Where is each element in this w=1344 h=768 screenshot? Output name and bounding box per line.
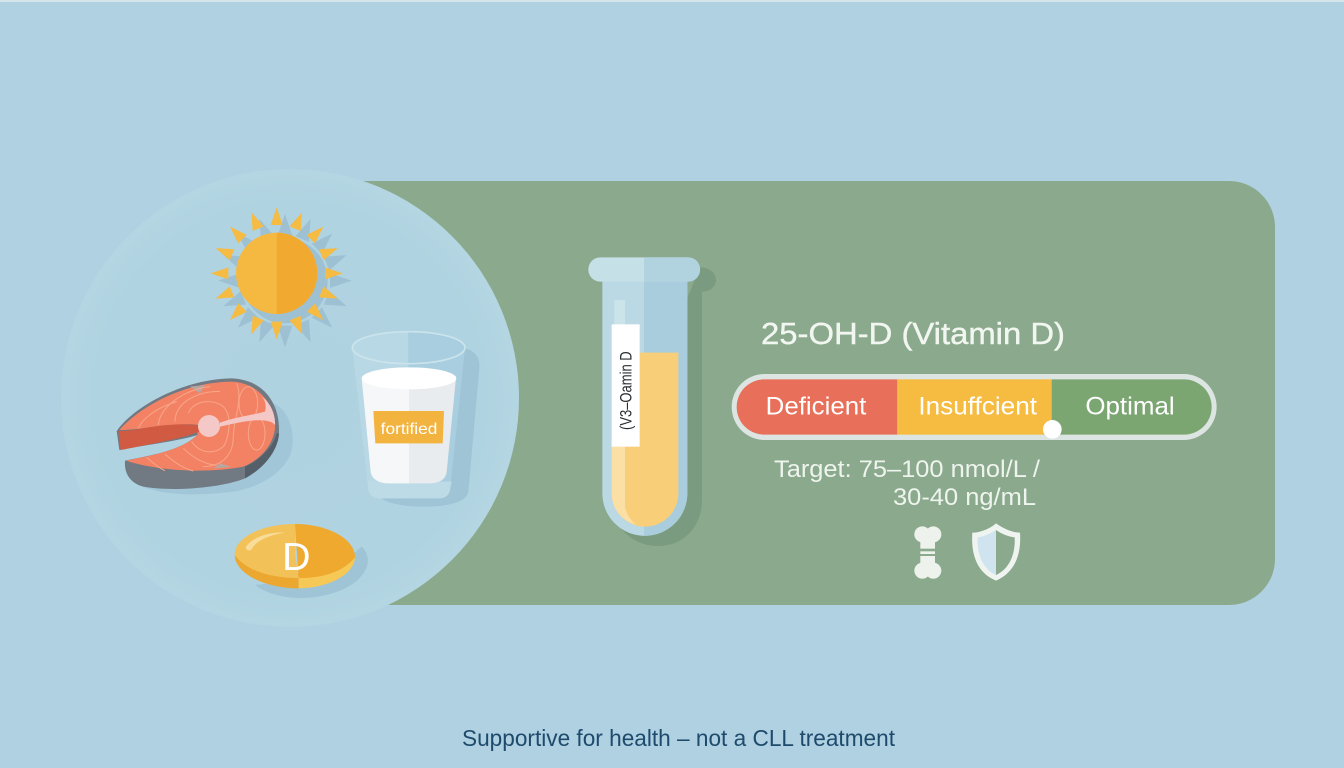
glass body [352,332,408,498]
tube highlight [614,300,625,325]
target range text: Target: 75–100 nmol/L / [774,456,1040,483]
fortified label [373,411,444,443]
segment: deficient: Deficient [766,393,866,421]
salmon cut edge [118,424,199,450]
tube label [612,324,640,447]
heading: 25-OH-D (Vitamin D): 25-OH-D (Vitamin D) [761,316,1065,351]
footer note: Supportive for health – not a CLL treatment [462,725,896,751]
tube shadow [620,267,716,546]
softgel letter D: D [282,535,311,579]
target range text: 30-40 ng/mL [893,484,1036,511]
glass shadow [380,348,479,507]
milk [362,367,456,483]
softgel shadow [255,547,368,598]
sun shadow rays [218,214,352,347]
softgel top [235,524,299,578]
softgel rim [235,556,299,588]
marker dot [1043,420,1062,439]
salmon skin highlights [190,385,232,468]
serum liquid [612,353,678,527]
salmon flesh contour lines [138,383,265,471]
segment: insufficient [897,379,1052,435]
sun disc [236,233,317,314]
softgel highlight [246,533,285,550]
salmon backbone [198,397,275,437]
fortified label: fortified [381,421,437,438]
segment: optimal: Optimal [1085,393,1175,421]
segment: deficient [737,379,897,435]
panel: vitamin D sources circle [61,169,519,627]
icon: blood test tube [588,257,716,546]
target range text [774,456,1040,511]
salmon flesh [119,382,275,471]
segment: optimal [1052,379,1212,435]
glass rim [352,332,465,364]
segment: insufficient: Insuffcient [918,393,1037,421]
status range bar [732,374,1217,440]
sun yellow rays [211,207,343,339]
bar track [732,374,1217,440]
icon: bone [914,526,941,579]
icon: vitamin D softgel [235,524,368,598]
salmon shadow [138,403,293,494]
icon: sun [211,207,352,347]
panel: green results background [300,181,1275,605]
icon: shield [972,523,1020,581]
icon: salmon steak [117,378,293,494]
tube label: (V3–Oamin D [617,351,635,430]
icon: glass of fortified milk [352,332,479,507]
salmon skin [117,378,279,489]
tube glass [602,277,687,536]
tube cap [588,257,700,282]
